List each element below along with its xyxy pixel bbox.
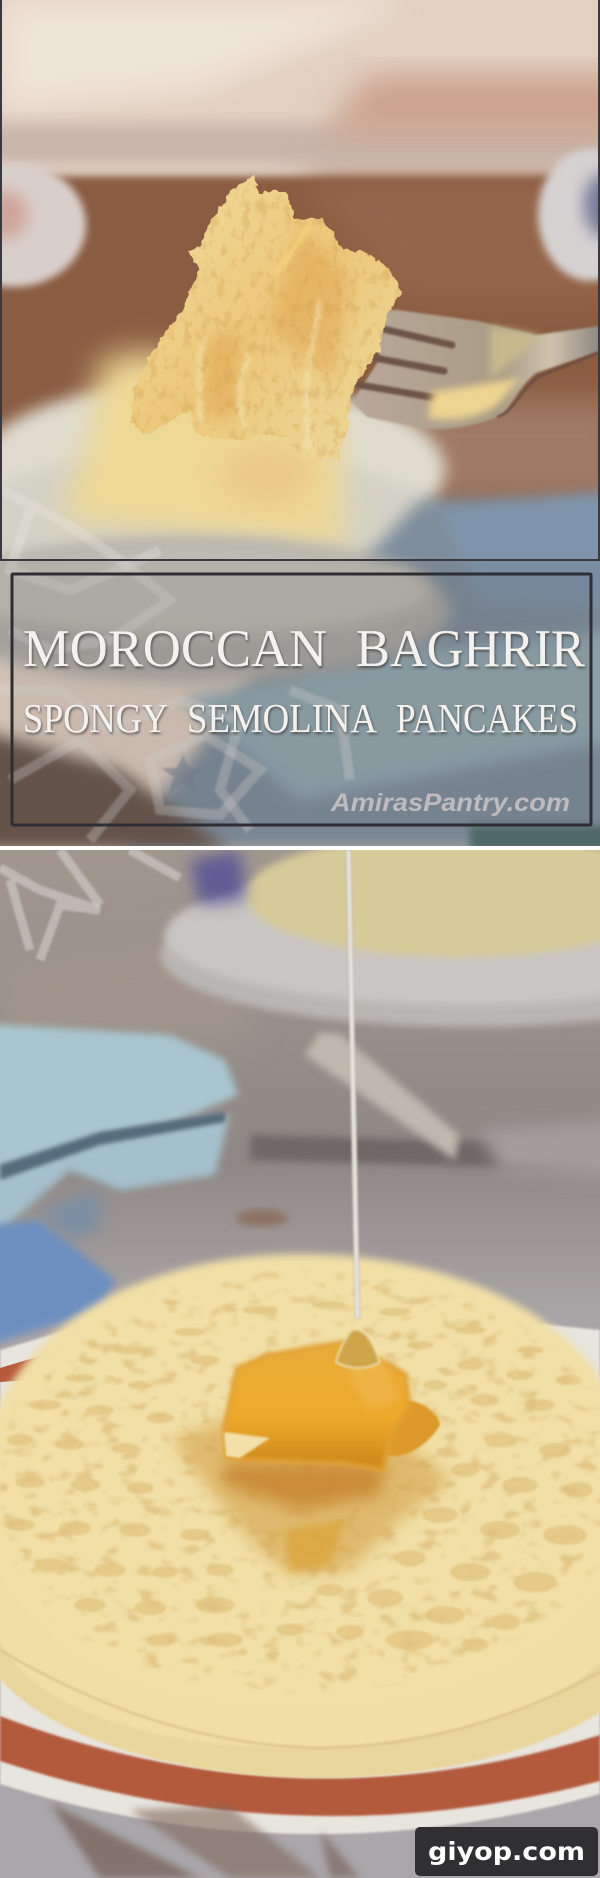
stack of pancakes bbox=[0, 1263, 600, 1778]
badge background bbox=[415, 1827, 598, 1876]
side and top frame lines of the title band bbox=[0, 0, 600, 561]
title line two: SEMOLINA bbox=[187, 695, 377, 741]
pancake holes bbox=[5, 1301, 593, 1652]
title line one: MOROCCAN bbox=[23, 620, 327, 678]
blurred fork and knife bbox=[250, 1032, 600, 1180]
blurred side plates bbox=[0, 149, 600, 287]
decorative star lattice on the top photo bbox=[0, 490, 350, 840]
icon: star in the lattice bbox=[162, 756, 195, 791]
smooth pancake rim bbox=[0, 1263, 600, 1699]
plate with red band bbox=[0, 1320, 600, 1834]
title line one bbox=[23, 620, 586, 678]
badge text: giyop.com bbox=[428, 1837, 585, 1866]
title line one: BAGHRIR bbox=[356, 620, 586, 678]
fork bbox=[352, 310, 600, 429]
wood grain at the table edge bbox=[50, 1803, 360, 1878]
site credit: AmirasPantry.com bbox=[330, 789, 570, 817]
background pancake on stacked plates bbox=[160, 833, 600, 1027]
panel: top photo of pancake bite on a fork bbox=[0, 0, 600, 850]
middle pancake bbox=[0, 1585, 600, 1746]
title panel bbox=[0, 561, 600, 846]
source badge bbox=[415, 1827, 598, 1876]
pancake hole texture bbox=[0, 1263, 600, 1699]
fork tine slots bbox=[360, 329, 452, 398]
honey thread bbox=[346, 850, 360, 1318]
top pancake bbox=[0, 1267, 600, 1552]
title overlay box bbox=[12, 574, 591, 825]
photo background: wooden table bbox=[0, 850, 600, 1878]
decorative star lattice on the bottom photo bbox=[0, 850, 180, 960]
lower pancake bbox=[0, 1640, 600, 1780]
pancake bite bbox=[130, 176, 402, 461]
blue napkin bbox=[0, 1024, 238, 1345]
honey coated butter bbox=[224, 1342, 409, 1470]
photo background: wall and table bbox=[0, 0, 600, 846]
title line two bbox=[23, 695, 578, 741]
honey pool bbox=[172, 1399, 452, 1575]
blurred plate with pancake bbox=[0, 330, 455, 567]
honey drop on butter bbox=[336, 1330, 380, 1368]
blurred napkin and plates under the title bbox=[0, 490, 600, 850]
panel: bottom photo of honey drizzled on pancakes bbox=[0, 833, 600, 1878]
title band tint bbox=[0, 561, 600, 846]
title line two: SPONGY bbox=[23, 695, 168, 741]
